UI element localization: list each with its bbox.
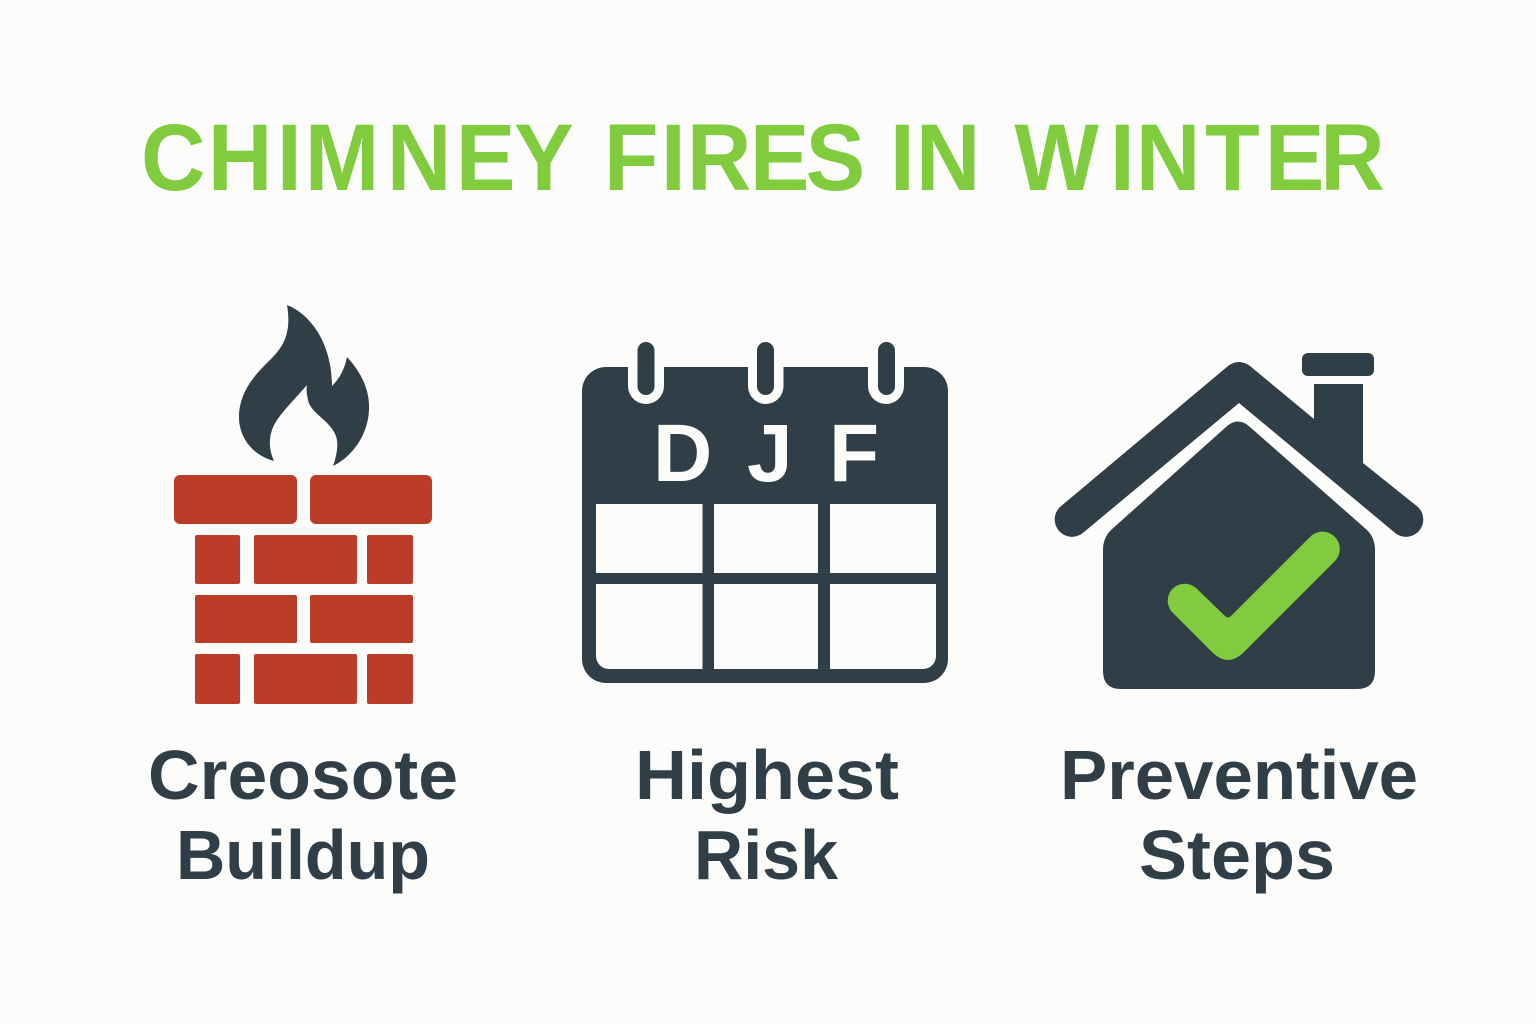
panel: creosote buildup xyxy=(148,305,458,894)
label: creosote buildup: Creosote xyxy=(148,736,458,814)
label: preventive steps: Preventive xyxy=(1060,736,1418,814)
icon: house with chimney xyxy=(1055,353,1423,689)
panel: preventive steps xyxy=(1055,353,1423,894)
label: highest risk: Highest xyxy=(635,736,899,814)
icon: check mark xyxy=(1168,532,1340,660)
calendar months: DJF xyxy=(653,408,879,499)
label: creosote buildup: Buildup xyxy=(176,816,430,894)
icon: flame xyxy=(239,305,369,466)
calendar binding rings xyxy=(628,340,904,404)
label: highest risk: Risk xyxy=(694,816,838,894)
icon: brick chimney xyxy=(174,475,432,704)
panel: highest risk xyxy=(582,340,948,894)
title: CHIMNEY FIRES IN WINTER xyxy=(141,104,1385,211)
icon: calendar xyxy=(582,340,948,683)
label: preventive steps: Steps xyxy=(1139,816,1335,894)
